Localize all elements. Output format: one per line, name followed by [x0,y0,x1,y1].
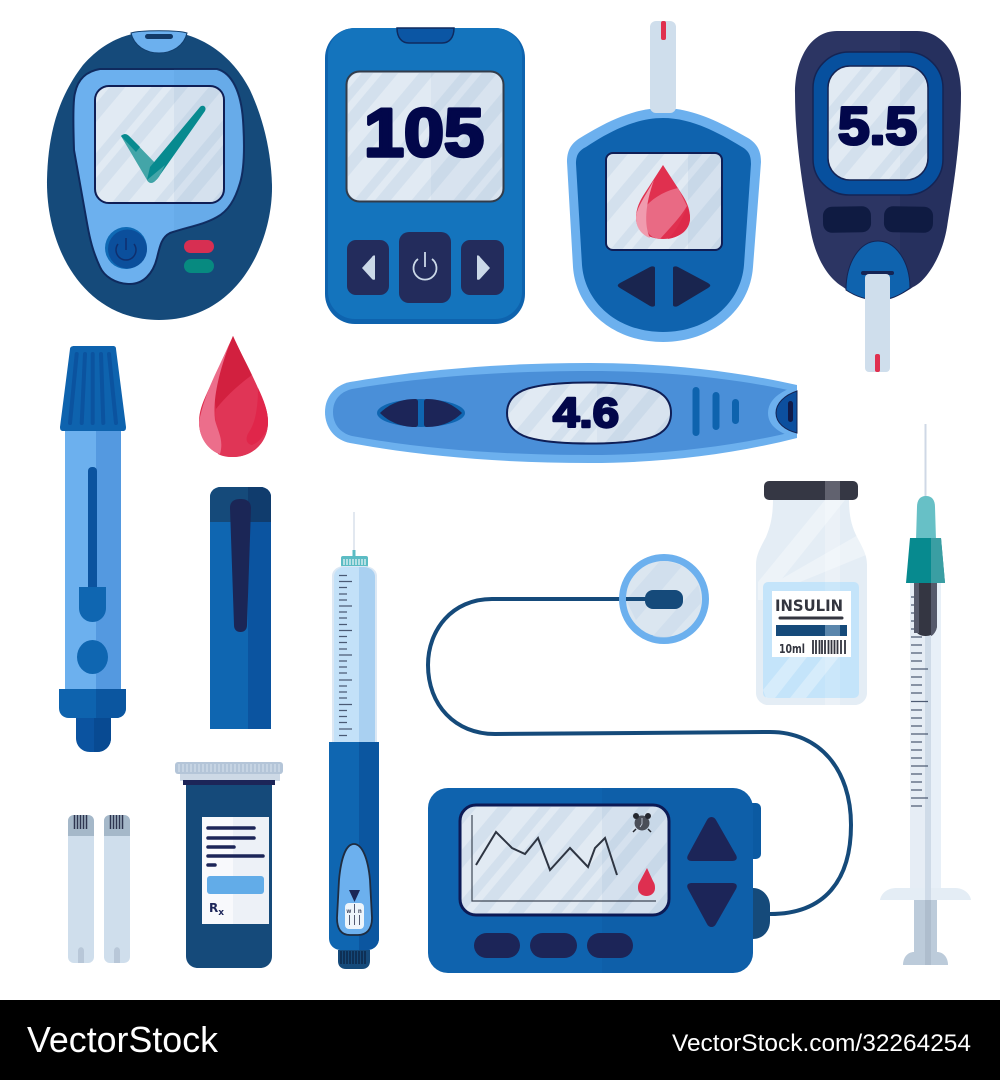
glucose meter: rectangular reading 105 [325,28,525,324]
release button [77,640,108,674]
reading 5.5: 5.5 [838,97,917,156]
glass bottle [756,498,867,705]
icon: blood drop [636,165,690,239]
needle cover [906,496,945,583]
glucose line chart [472,815,656,901]
screen [95,86,224,203]
up button [687,817,737,861]
down button [687,883,737,927]
outer shell [325,363,797,463]
dose knob [338,950,370,969]
reading 4.6: 4.6 [553,389,619,436]
strip 1 [68,815,94,963]
plunger tip [914,583,937,636]
reading 105: 105 [364,95,484,171]
liquid [763,582,859,698]
screen [828,66,928,180]
screen [507,382,671,444]
label: R [209,901,218,915]
left button [347,240,389,295]
navigation buttons [377,399,465,427]
power button [105,227,147,269]
glucose meter: navy reading 5.5 [795,31,961,372]
icon: large blood drop [199,336,268,457]
glass cartridge [332,566,377,742]
arrow buttons [618,266,710,307]
glucose meter: slim pen style reading 4.6 [325,363,797,463]
strip 2 [104,815,130,963]
right button [461,240,504,295]
footer watermark bar [0,1000,1000,1080]
vial label: 10ml [779,641,805,656]
status lights [184,240,214,273]
function buttons [474,933,633,958]
dose window: w [346,909,352,915]
needle hub [341,556,368,567]
syringe [880,424,971,965]
image id: VectorStock.com/32264254 [672,1030,971,1057]
test strips pair [68,815,130,963]
test strip [865,274,890,372]
dose window: n [358,909,362,915]
meter body [567,108,761,342]
infusion site sensor [622,558,706,640]
lid [175,762,283,785]
light blue faceplate [73,69,244,284]
barrel [910,583,941,889]
display frame [813,52,943,195]
screen [460,805,669,915]
icon: small blood drop [638,868,655,896]
vent slots [692,387,739,436]
inner shell [333,371,797,455]
insulin vial [756,481,867,705]
lancing device [59,346,126,752]
tube connector [745,888,770,939]
flange [880,888,971,900]
insulin pump [428,788,770,973]
cap [764,481,858,500]
glucose meter: shield with blood drop [567,21,761,342]
plunger foot [903,952,948,965]
slider track and knob [79,467,106,622]
needle [924,424,926,498]
pen body [329,742,379,950]
body [65,428,121,691]
pump body [428,788,753,973]
tip [76,718,111,752]
buttons [823,206,933,233]
glass highlights [758,500,866,600]
label [202,817,269,924]
scale ticks [911,597,928,806]
test strip [650,21,676,113]
icon: check mark [121,106,206,183]
strip port [846,241,910,300]
screen [606,153,722,250]
vial label: INSULIN [775,596,843,615]
glucose meter: oval with check mark [47,31,272,320]
meter body [795,31,961,300]
insulin pen [329,512,379,969]
brand name: VectorStock [27,1019,219,1060]
vial label [772,591,851,657]
bottle body [186,785,272,968]
collar [59,689,126,718]
meter body [47,31,272,320]
side tab [745,803,761,859]
lancet cap [210,487,271,729]
infusion tubing [428,599,851,914]
ribbed cap [60,346,126,431]
plunger rod [914,900,937,953]
label: x [218,908,224,918]
meter body [325,28,525,324]
power button [399,232,451,303]
icon: alarm clock [633,813,651,832]
dose window [337,844,372,935]
needle [353,512,355,552]
prescription bottle [175,762,283,968]
screen [346,72,504,202]
